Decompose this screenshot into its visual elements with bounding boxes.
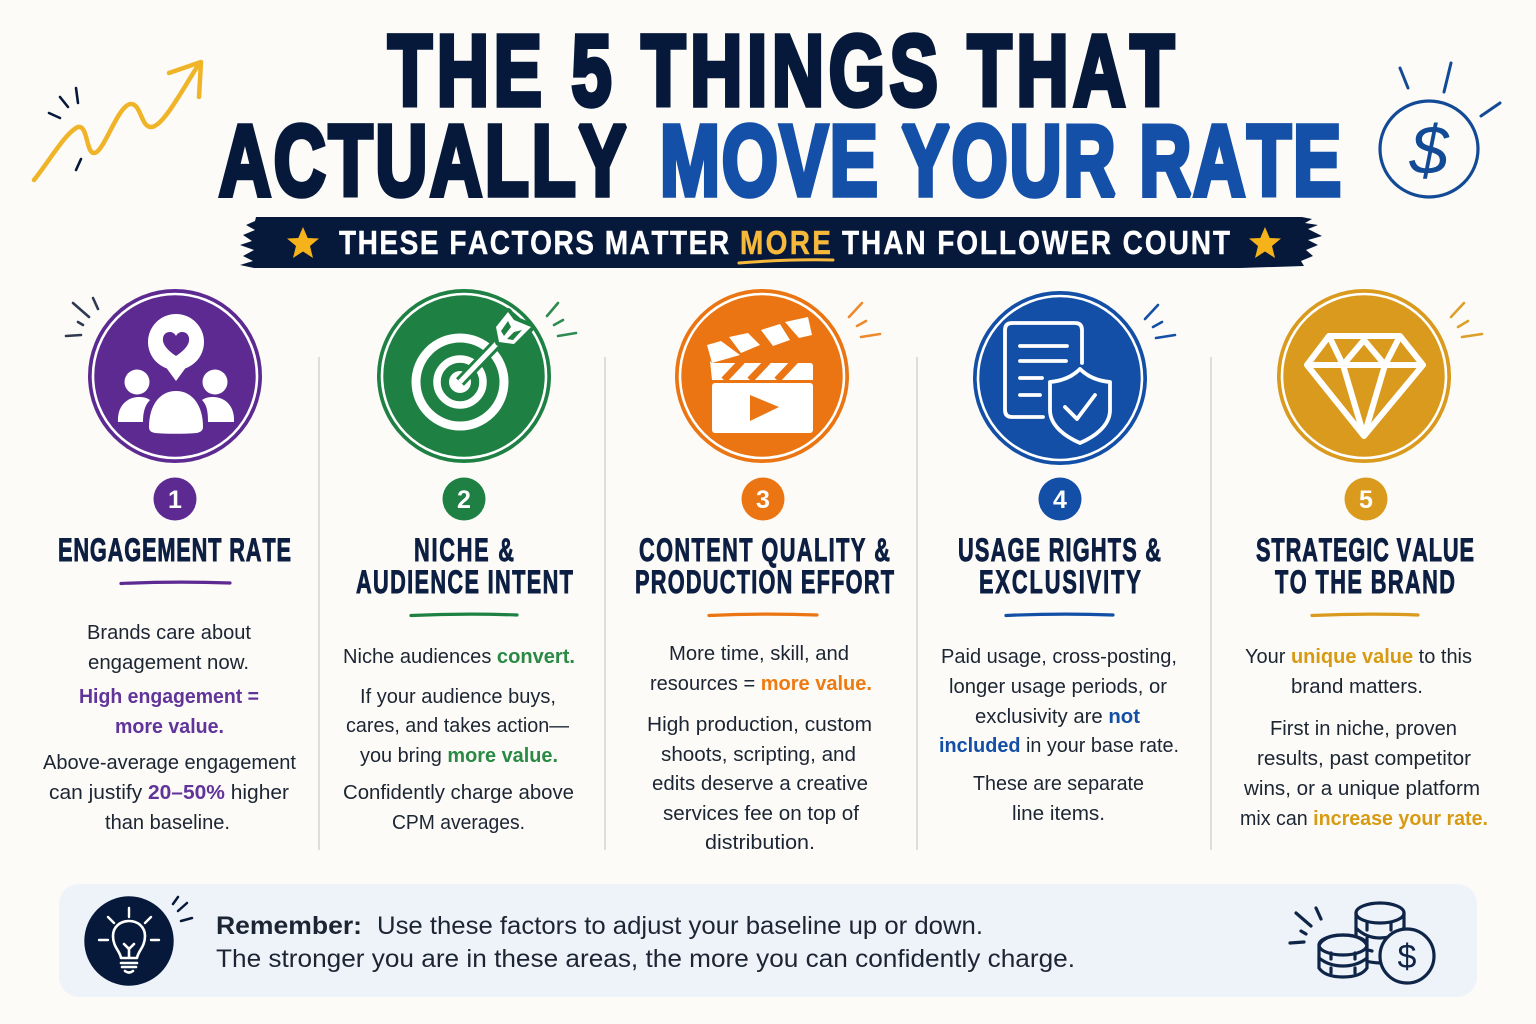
body text 3: resources = more value. — [650, 673, 872, 695]
number badge 3 — [742, 478, 784, 520]
number badge 4 — [1038, 478, 1082, 520]
icon: document with shield — [973, 291, 1175, 465]
number badge 1 — [154, 478, 196, 520]
body text 5: Your unique value to this — [1245, 646, 1472, 668]
panel: content quality — [635, 289, 894, 854]
title: THE 5 THINGS THAT — [388, 15, 1174, 127]
panel: engagement rate — [43, 289, 296, 834]
body text 3: services fee on top of — [663, 803, 859, 825]
icon: diamond — [1277, 289, 1482, 463]
panel: niche and audience intent — [343, 289, 576, 834]
icon: coin stacks — [1290, 903, 1434, 983]
subtitle text: MORE — [740, 225, 831, 262]
body text 3: High production, custom — [647, 714, 872, 736]
heading 2: AUDIENCE INTENT — [356, 564, 573, 600]
panel: strategic value — [1240, 289, 1488, 830]
body text 5: First in niche, proven — [1270, 718, 1457, 740]
icon: light bulb — [84, 896, 192, 986]
body text 5: mix can increase your rate. — [1240, 808, 1488, 830]
heading 5: TO THE BRAND — [1275, 564, 1455, 600]
subtitle banner — [240, 217, 1322, 268]
heading 2: NICHE & — [414, 532, 514, 568]
subtitle text — [339, 225, 1230, 262]
body text 5: results, past competitor — [1257, 748, 1471, 770]
callout text: The stronger you are in these areas, the more you can confidently charge. — [216, 945, 1075, 973]
panel: usage rights — [939, 291, 1179, 825]
body text 5 — [1240, 646, 1488, 830]
title: MOVE YOUR RATE — [660, 105, 1341, 217]
number badge 4: 4 — [1053, 486, 1067, 514]
heading 5 — [1256, 532, 1474, 616]
heading 3: CONTENT QUALITY & — [639, 532, 890, 568]
body text 1: engagement now. — [88, 652, 249, 674]
body text 1: Above-average engagement — [43, 752, 296, 774]
body text 1: High engagement = — [79, 686, 259, 708]
body text 2: Confidently charge above — [343, 782, 574, 804]
callout text — [216, 912, 1075, 973]
body text 4: Paid usage, cross-posting, — [941, 646, 1177, 668]
body text 4: line items. — [1012, 803, 1105, 825]
title — [219, 15, 1341, 217]
body text 2: CPM averages. — [392, 812, 525, 834]
heading 1: ENGAGEMENT RATE — [58, 532, 291, 568]
body text 1: can justify 20–50% higher — [49, 782, 289, 804]
body text 3: More time, skill, and — [669, 643, 849, 665]
body text 3: shoots, scripting, and — [661, 744, 856, 766]
body text 1: Brands care about — [87, 622, 251, 644]
body text 3: distribution. — [705, 832, 815, 854]
number badge 1: 1 — [168, 486, 182, 514]
body text 2: cares, and takes action— — [346, 715, 569, 737]
callout text: Remember: — [216, 912, 362, 940]
number badge 2: 2 — [457, 486, 471, 514]
subtitle text: THESE FACTORS MATTER — [339, 225, 729, 262]
icon: dollar coin: $ — [1409, 111, 1450, 189]
heading 3 — [635, 532, 894, 616]
body text 4 — [939, 646, 1179, 825]
callout: remember — [59, 884, 1477, 997]
body text 5: wins, or a unique platform — [1243, 778, 1480, 800]
subtitle text: THAN FOLLOWER COUNT — [842, 225, 1230, 262]
title: ACTUALLY — [219, 105, 627, 217]
star left — [287, 227, 319, 258]
icon: target with arrow — [377, 289, 576, 463]
body text 1: more value. — [115, 716, 224, 738]
icon: rising arrow — [34, 62, 201, 180]
icon: coin stacks: $ — [1398, 938, 1417, 976]
body text 4: These are separate — [973, 773, 1144, 795]
body text 4: longer usage periods, or — [949, 676, 1167, 698]
body text 3 — [647, 643, 872, 854]
body text 2: If your audience buys, — [360, 686, 556, 708]
body text 4: exclusivity are not — [975, 706, 1140, 728]
icon: clapperboard — [675, 289, 880, 463]
heading 4 — [958, 532, 1161, 616]
body text 1: than baseline. — [105, 812, 230, 834]
body text 2: you bring more value. — [360, 745, 558, 767]
body text 1 — [43, 622, 296, 834]
star right — [1249, 227, 1281, 258]
icon: dollar coin — [1380, 63, 1500, 197]
icon: audience with heart — [66, 289, 262, 463]
heading 2 — [356, 532, 573, 616]
number badge 5: 5 — [1359, 486, 1373, 514]
number badge 2 — [442, 478, 486, 520]
heading 4: EXCLUSIVITY — [979, 564, 1141, 600]
body text 3: edits deserve a creative — [652, 773, 868, 795]
body text 5: brand matters. — [1291, 676, 1423, 698]
body text 2: Niche audiences convert. — [343, 646, 575, 668]
number badge 5 — [1344, 478, 1388, 520]
number badge 3: 3 — [756, 486, 770, 514]
body text 4: included in your base rate. — [939, 735, 1179, 757]
callout text: Use these factors to adjust your baseline up or down. — [377, 912, 983, 940]
heading 5: STRATEGIC VALUE — [1256, 532, 1474, 568]
body text 2 — [343, 646, 575, 834]
heading 4: USAGE RIGHTS & — [958, 532, 1161, 568]
heading 3: PRODUCTION EFFORT — [635, 564, 894, 600]
